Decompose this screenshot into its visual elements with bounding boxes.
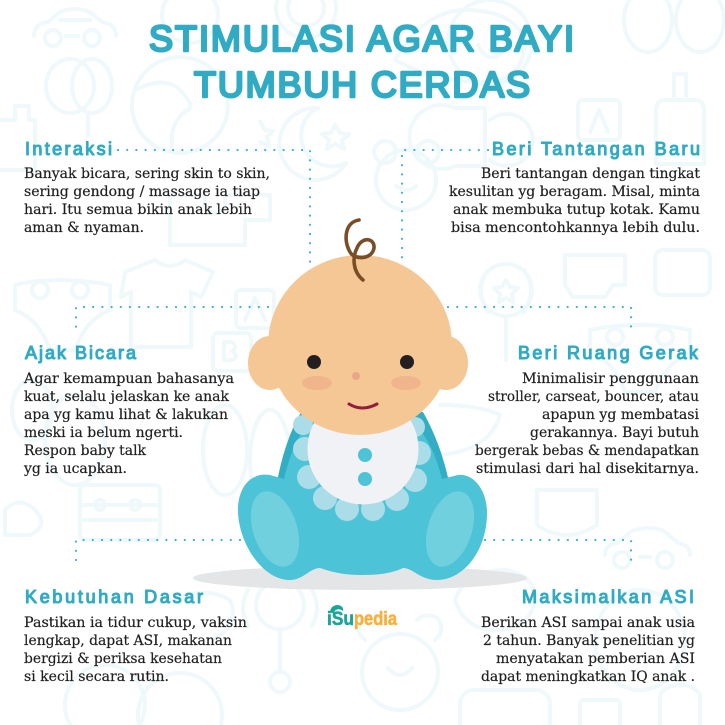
panel: Kebutuhan Dasar: si kecil secara rutin. — [24, 669, 169, 685]
panel: Interaksi: hari. Itu semua bikin anak lebih — [24, 202, 252, 218]
panel: Interaksi: Interaksi — [25, 139, 112, 159]
dotted connector lines — [76, 150, 631, 568]
panel: Kebutuhan Dasar: Pastikan ia tidur cukup, vaksin — [24, 615, 247, 631]
panel: Ajak Bicara: kuat, selalu jelaskan ke anak — [24, 389, 230, 405]
panel: Kebutuhan Dasar: bergizi & periksa kesehatan — [24, 651, 222, 667]
panel: Interaksi: Banyak bicara, sering skin to skin, — [24, 166, 270, 182]
title — [149, 18, 574, 105]
panel: Beri Ruang Gerak: Beri Ruang Gerak — [518, 343, 699, 363]
title: TUMBUH CERDAS — [194, 64, 530, 105]
panel: Ajak Bicara: Respon baby talk — [24, 443, 147, 459]
mouth — [349, 404, 377, 408]
panel: Ajak Bicara: apa yg kamu lihat & lakukan — [24, 407, 228, 423]
panel: Beri Ruang Gerak: Minimalisir penggunaan — [522, 371, 699, 387]
panel: Kebutuhan Dasar — [24, 587, 247, 685]
panel: Beri Tantangan Baru: Beri Tantangan Baru — [492, 139, 700, 159]
bib — [293, 394, 431, 521]
panel: Beri Ruang Gerak: apapun yg membatasi — [542, 407, 700, 423]
panel: Maksimalkan ASI: menyatakan pemberian ASI — [496, 651, 695, 667]
cheeks — [302, 376, 421, 390]
logo: pedia — [354, 609, 397, 630]
panel: Maksimalkan ASI: Berikan ASI sampai anak usia — [481, 615, 695, 631]
panel: Ajak Bicara: yg ia ucapkan. — [23, 461, 127, 477]
panel: Maksimalkan ASI: dapat meningkatkan IQ anak . — [481, 669, 695, 685]
panel: Ajak Bicara: meski ia belum ngerti. — [24, 425, 183, 441]
left sole — [242, 485, 308, 573]
panel: Interaksi: aman & nyaman. — [24, 220, 144, 236]
head — [268, 255, 452, 435]
baby body and legs — [238, 428, 487, 580]
panel: Ajak Bicara — [23, 343, 234, 477]
panel: Beri Ruang Gerak: stroller, carseat, bouncer, atau — [488, 389, 699, 405]
panel: Beri Ruang Gerak: bergerak bebas & mendapatkan — [475, 443, 699, 459]
panel: Beri Tantangan Baru: anak membuka tutup kotak. Kamu — [453, 202, 700, 218]
panel: Beri Tantangan Baru: kesulitan yg beragam. Misal, minta — [449, 184, 700, 200]
panel: Maksimalkan ASI: Maksimalkan ASI — [522, 587, 694, 607]
nose — [352, 372, 360, 380]
ears — [248, 336, 468, 390]
panel: Ajak Bicara: Ajak Bicara — [25, 343, 137, 363]
panel: Beri Tantangan Baru: bisa mencontohkannya lebih dulu. — [451, 220, 700, 236]
eyes — [307, 355, 414, 369]
panel: Maksimalkan ASI — [481, 587, 695, 685]
panel: Interaksi: sering gendong / massage ia tiap — [24, 184, 260, 200]
panel: Beri Tantangan Baru — [449, 139, 701, 236]
panel: Beri Tantangan Baru: Beri tantangan dengan tingkat — [481, 166, 701, 182]
right sole — [417, 485, 483, 573]
icon: baby illustration — [193, 220, 527, 590]
hair curl — [346, 220, 374, 280]
panel: Ajak Bicara: Agar kemampuan bahasanya — [23, 371, 234, 387]
floor shadow — [193, 566, 527, 590]
logo — [327, 605, 397, 630]
panel: Beri Ruang Gerak: stimulasi dari hal disekitarnya. — [476, 461, 699, 477]
panel: Kebutuhan Dasar: lengkap, dapat ASI, makanan — [24, 633, 232, 649]
panel: Beri Ruang Gerak: gerakannya. Bayi butuh — [530, 425, 699, 441]
baby back — [277, 412, 449, 482]
logo: iSu — [327, 609, 354, 630]
panel: Kebutuhan Dasar: Kebutuhan Dasar — [25, 587, 203, 607]
panel: Maksimalkan ASI: 2 tahun. Banyak penelitian yg — [483, 633, 695, 649]
title: STIMULASI AGAR BAYI — [149, 18, 574, 59]
panel: Interaksi — [24, 139, 270, 236]
panel: Beri Ruang Gerak — [475, 343, 700, 477]
